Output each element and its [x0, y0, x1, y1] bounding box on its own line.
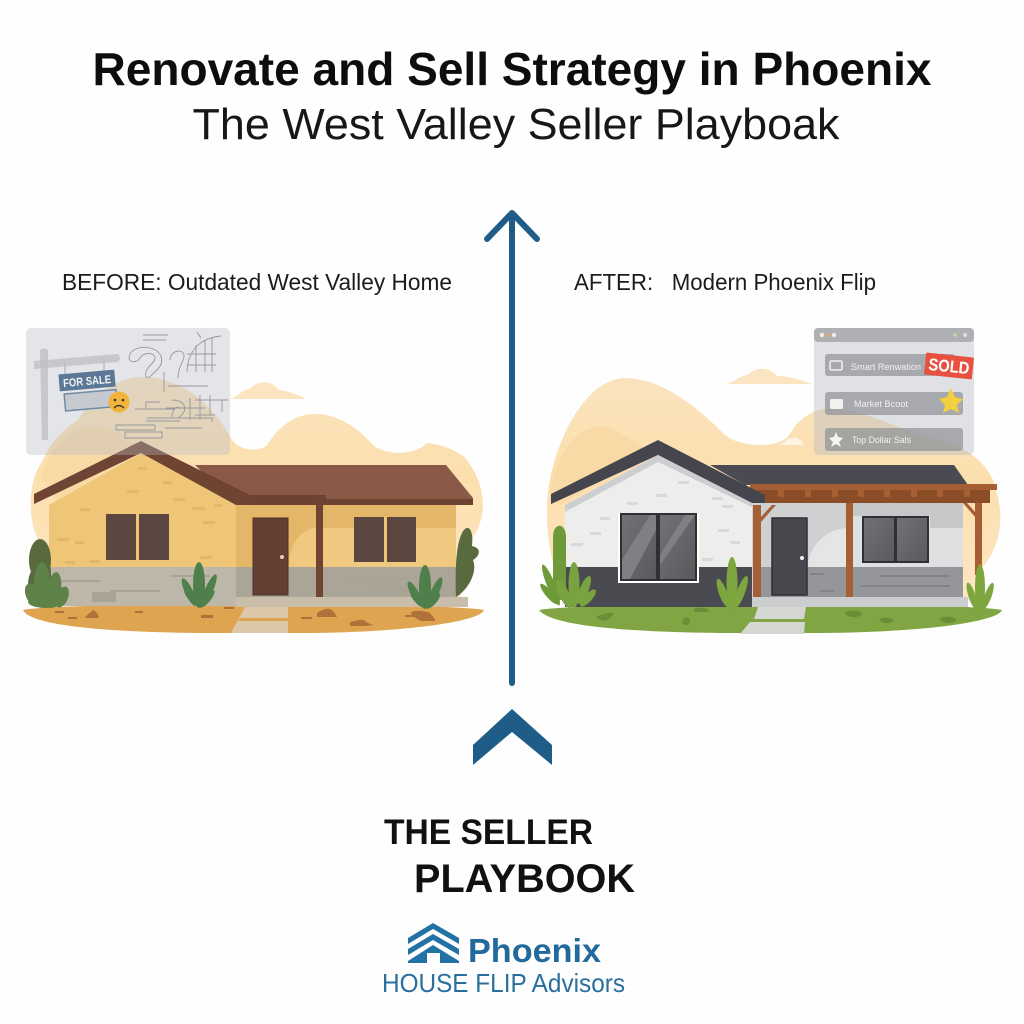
grass patches [596, 608, 956, 625]
main roof [710, 465, 968, 485]
shrub: middle [714, 557, 751, 609]
icon: sign post [34, 348, 120, 440]
icon: sold stamp: SOLD [928, 355, 970, 378]
main roof [195, 465, 473, 505]
background hills [31, 377, 483, 600]
porch wall [752, 500, 963, 597]
arrow: central upward [487, 213, 537, 683]
left window [618, 513, 699, 583]
title: Renovate and Sell Strategy in Phoenix [92, 43, 932, 95]
shrub: middle [179, 562, 220, 610]
shrub: left cactus cluster [538, 526, 598, 610]
logo tagline: HOUSE FLIP Advisors [382, 968, 625, 998]
shrub: right [405, 565, 445, 611]
gable roof [34, 441, 250, 505]
for sale sign [58, 370, 117, 411]
panel: after overlay app card [814, 328, 974, 455]
right window [862, 516, 929, 563]
row: top dollar sale: Top Dollar Sals [852, 435, 911, 445]
logo wordmark: Phoenix [468, 932, 602, 969]
walkway [231, 607, 288, 633]
row: market boost [825, 392, 963, 415]
right window [354, 517, 416, 562]
subtitle: The West Valley Seller Playboak [192, 100, 841, 149]
clouds [228, 382, 306, 399]
icon: sad face [108, 392, 130, 412]
shrub: back right [456, 528, 479, 597]
porch beam [750, 484, 997, 503]
for sale sign: FOR SALE [63, 374, 112, 390]
icon: star [939, 388, 963, 413]
right wall [236, 500, 456, 598]
stone base [49, 567, 236, 606]
shrub: front left [22, 562, 72, 609]
icon: chevron [473, 709, 552, 765]
gable roof [551, 440, 765, 504]
row: smart renovation: Smart Renwation [851, 362, 921, 372]
icon: question marks and sketches [116, 332, 228, 438]
heading: playbook: PLAYBOOK [414, 857, 635, 901]
brick marks [571, 481, 740, 561]
label: before: BEFORE: Outdated West Valley Home [62, 269, 452, 295]
shrub: right [964, 564, 996, 612]
panel: after house illustration [538, 369, 1002, 634]
post [316, 500, 323, 597]
row: top dollar sale [825, 428, 963, 451]
row: smart renovation [825, 354, 955, 376]
walkway [740, 607, 806, 634]
logo [382, 923, 625, 998]
shrub: back left [28, 539, 51, 603]
ground [23, 604, 484, 633]
clouds [725, 369, 812, 384]
gable wall [49, 453, 236, 600]
background hills [547, 378, 1000, 600]
door [772, 518, 807, 595]
row: market boost: Market Bcoot [854, 399, 908, 409]
brick marks [57, 467, 222, 564]
panel: before overlay confusion card [26, 328, 230, 455]
panel: before house illustration [22, 377, 484, 633]
gable wall [565, 455, 752, 607]
ground [539, 604, 1002, 633]
icon: house chevrons [408, 923, 459, 963]
door [253, 518, 288, 595]
posts [753, 503, 982, 597]
left window [106, 514, 169, 560]
label: after: AFTER: Modern Phoenix Flip [574, 269, 876, 295]
dirt clumps [85, 609, 435, 626]
stone base [761, 567, 963, 597]
dark base [565, 567, 752, 607]
heading: the seller: THE SELLER [384, 813, 593, 852]
